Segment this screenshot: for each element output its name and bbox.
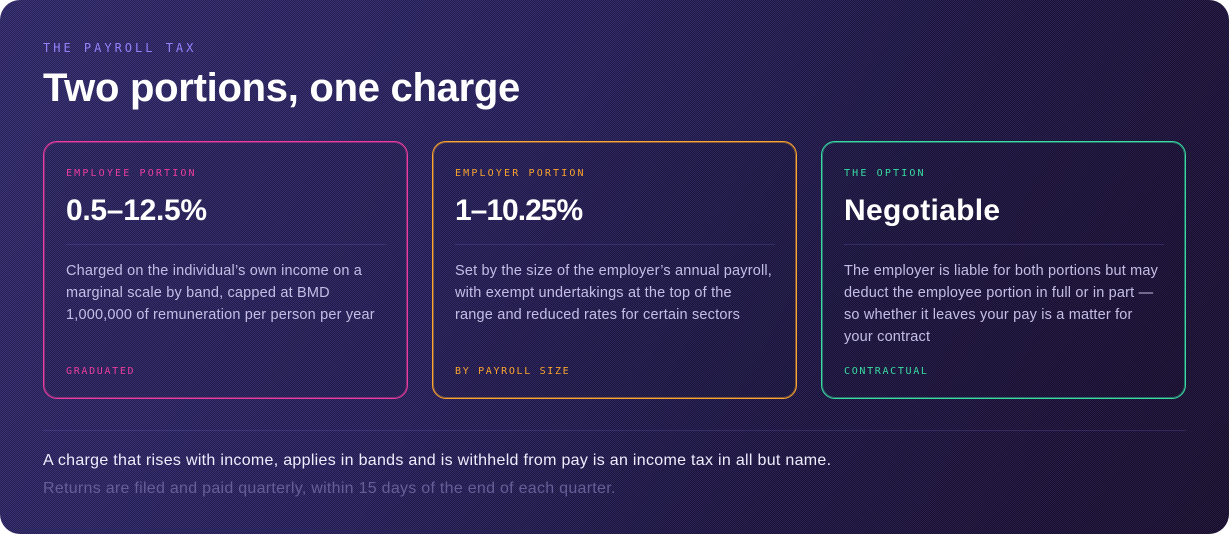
tag: CONTRACTUAL: [844, 366, 929, 376]
tag: BY PAYROLL SIZE: [455, 366, 570, 376]
description: range and reduced rates for certain sectors: [455, 306, 740, 322]
panel: the option: [821, 141, 1186, 399]
description: [844, 262, 1158, 344]
tag: GRADUATED: [66, 366, 135, 376]
description: deduct the employee portion in full or in part —: [844, 284, 1153, 300]
eyebrow: THE PAYROLL TAX: [43, 41, 196, 55]
description: 1,000,000 of remuneration per person per year: [66, 306, 375, 322]
description: with exempt undertakings at the top of the: [455, 284, 732, 300]
description: marginal scale by band, capped at BMD: [66, 284, 330, 300]
description: The employer is liable for both portions but may: [844, 262, 1158, 278]
description: Set by the size of the employer’s annual payroll,: [455, 262, 772, 278]
conclusion text: A charge that rises with income, applies in bands and is withheld from pay is an income tax in all but name.: [43, 452, 831, 469]
description: [66, 262, 375, 322]
value: 1–10.25%: [455, 194, 582, 226]
label: EMPLOYEE PORTION: [66, 168, 197, 178]
description: Charged on the individual’s own income on a: [66, 262, 362, 278]
panel: employee portion: [43, 141, 408, 399]
value: Negotiable: [844, 194, 1000, 226]
value: 0.5–12.5%: [66, 194, 207, 226]
description: so whether it leaves your pay is a matter for: [844, 306, 1133, 322]
description: your contract: [844, 328, 930, 344]
title: Two portions, one charge: [43, 66, 520, 110]
label: EMPLOYER PORTION: [455, 168, 586, 178]
filing note: Returns are filed and paid quarterly, within 15 days of the end of each quarter.: [43, 480, 616, 497]
label: THE OPTION: [844, 168, 926, 178]
description: [455, 262, 772, 322]
panel: employer portion: [432, 141, 797, 399]
